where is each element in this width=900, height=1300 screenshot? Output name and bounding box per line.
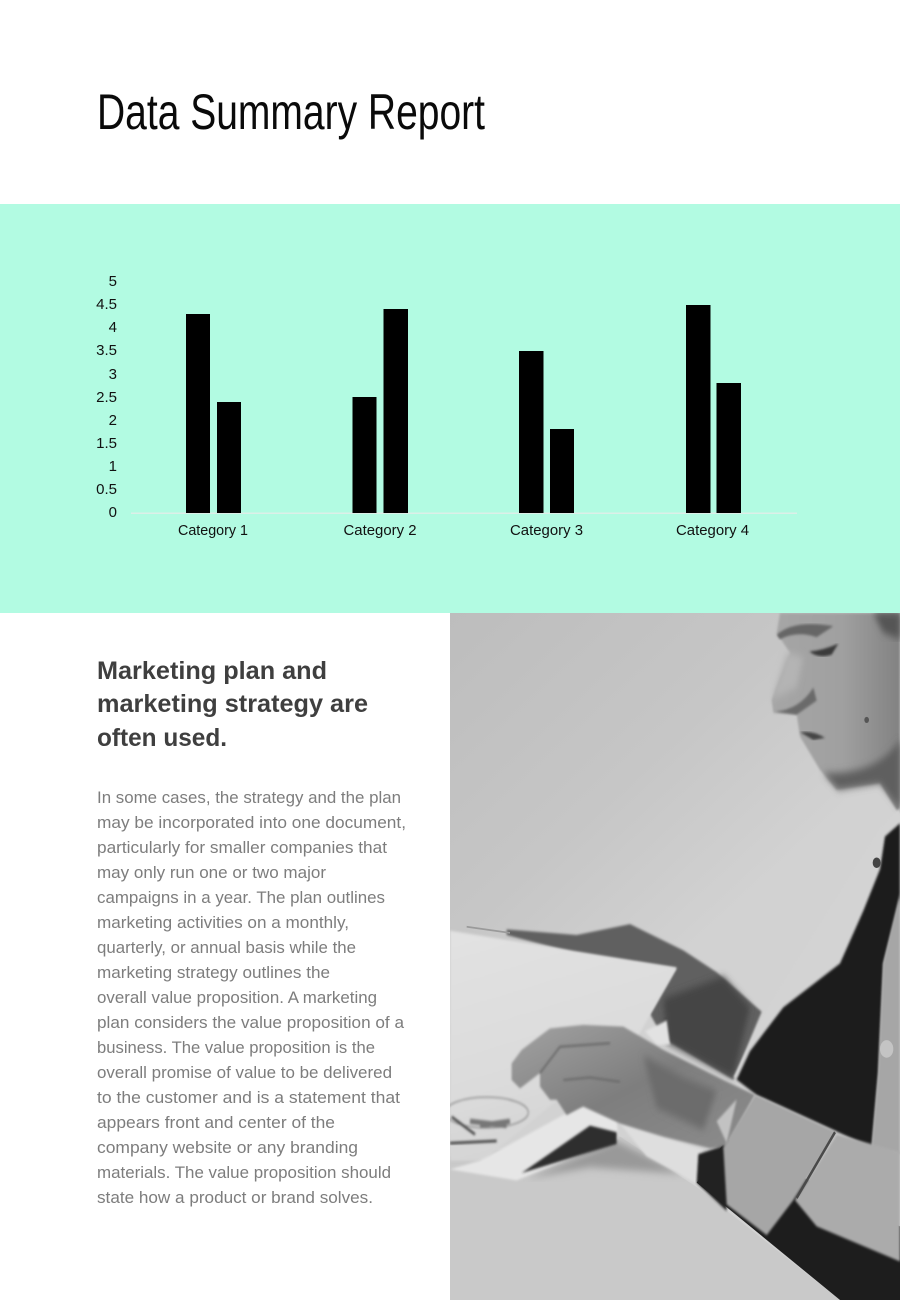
body text: to the customer and is a statement that <box>97 1088 400 1107</box>
body text: plan considers the value proposition of a <box>97 1013 405 1032</box>
jaw shadow <box>823 740 900 808</box>
finger gaps <box>540 1043 620 1082</box>
photo: man reading a magazine at a table <box>450 613 900 1300</box>
body text: may be incorporated into one document, <box>97 813 406 832</box>
y axis labels: 2 <box>109 412 117 429</box>
body text: overall value proposition. A marketing <box>97 988 377 1007</box>
magazine <box>450 931 677 1161</box>
y axis labels: 1 <box>109 458 117 475</box>
bar chart <box>96 273 797 539</box>
heading: Marketing plan and <box>97 657 327 685</box>
category labels: Category 4 <box>676 523 749 539</box>
category labels: Category 2 <box>344 523 416 539</box>
nose and mouth shadows <box>775 687 817 715</box>
dark torso base <box>697 1139 900 1300</box>
body text: state how a product or brand solves. <box>97 1188 373 1207</box>
rear arm and hand <box>507 924 762 1080</box>
front hand <box>512 1025 755 1148</box>
table <box>450 1134 840 1300</box>
shirt and vest <box>733 808 900 1095</box>
category labels: Category 3 <box>510 523 583 539</box>
small booklet <box>450 1106 618 1180</box>
body text: In some cases, the strategy and the plan <box>97 788 401 807</box>
sketch on page <box>445 1097 528 1143</box>
category labels: Category 1 <box>178 523 248 539</box>
body text: materials. The value proposition should <box>97 1163 391 1182</box>
body text: particularly for smaller companies that <box>97 838 387 857</box>
y axis labels: 1.5 <box>96 435 117 452</box>
y axis labels: 4 <box>109 319 117 336</box>
y axis labels: 4.5 <box>96 296 117 313</box>
hand shading <box>643 1056 717 1130</box>
body text: may only run one or two major <box>97 863 326 882</box>
body text: company website or any branding <box>97 1138 358 1157</box>
bars: category 4 <box>686 305 741 513</box>
body text: overall promise of value to be delivered <box>97 1063 392 1082</box>
y axis labels: 3.5 <box>96 342 117 359</box>
heading <box>97 657 368 752</box>
y axis labels <box>96 273 117 521</box>
body text: marketing activities on a monthly, <box>97 913 349 932</box>
y axis labels: 3 <box>109 366 117 383</box>
bars: category 3 <box>519 351 574 513</box>
y axis labels: 5 <box>109 273 117 290</box>
body text: business. The value proposition is the <box>97 1038 375 1057</box>
body text: marketing strategy outlines the <box>97 963 330 982</box>
brow and eye <box>777 624 833 639</box>
body text: campaigns in a year. The plan outlines <box>97 888 385 907</box>
bars: category 1 <box>186 314 241 513</box>
body text: appears front and center of the <box>97 1113 335 1132</box>
panel: chart band <box>0 204 900 613</box>
sleeve <box>697 1145 727 1211</box>
title: Data Summary Report <box>97 84 485 140</box>
body text <box>97 788 406 1207</box>
y axis labels: 2.5 <box>96 389 117 406</box>
y axis labels: 0 <box>109 504 117 521</box>
body text: quarterly, or annual basis while the <box>97 938 356 957</box>
category labels <box>178 523 749 539</box>
bars: category 2 <box>352 309 408 513</box>
y axis labels: 0.5 <box>96 481 117 498</box>
face <box>772 613 900 813</box>
heading: often used. <box>97 724 227 752</box>
heading: marketing strategy are <box>97 690 368 718</box>
